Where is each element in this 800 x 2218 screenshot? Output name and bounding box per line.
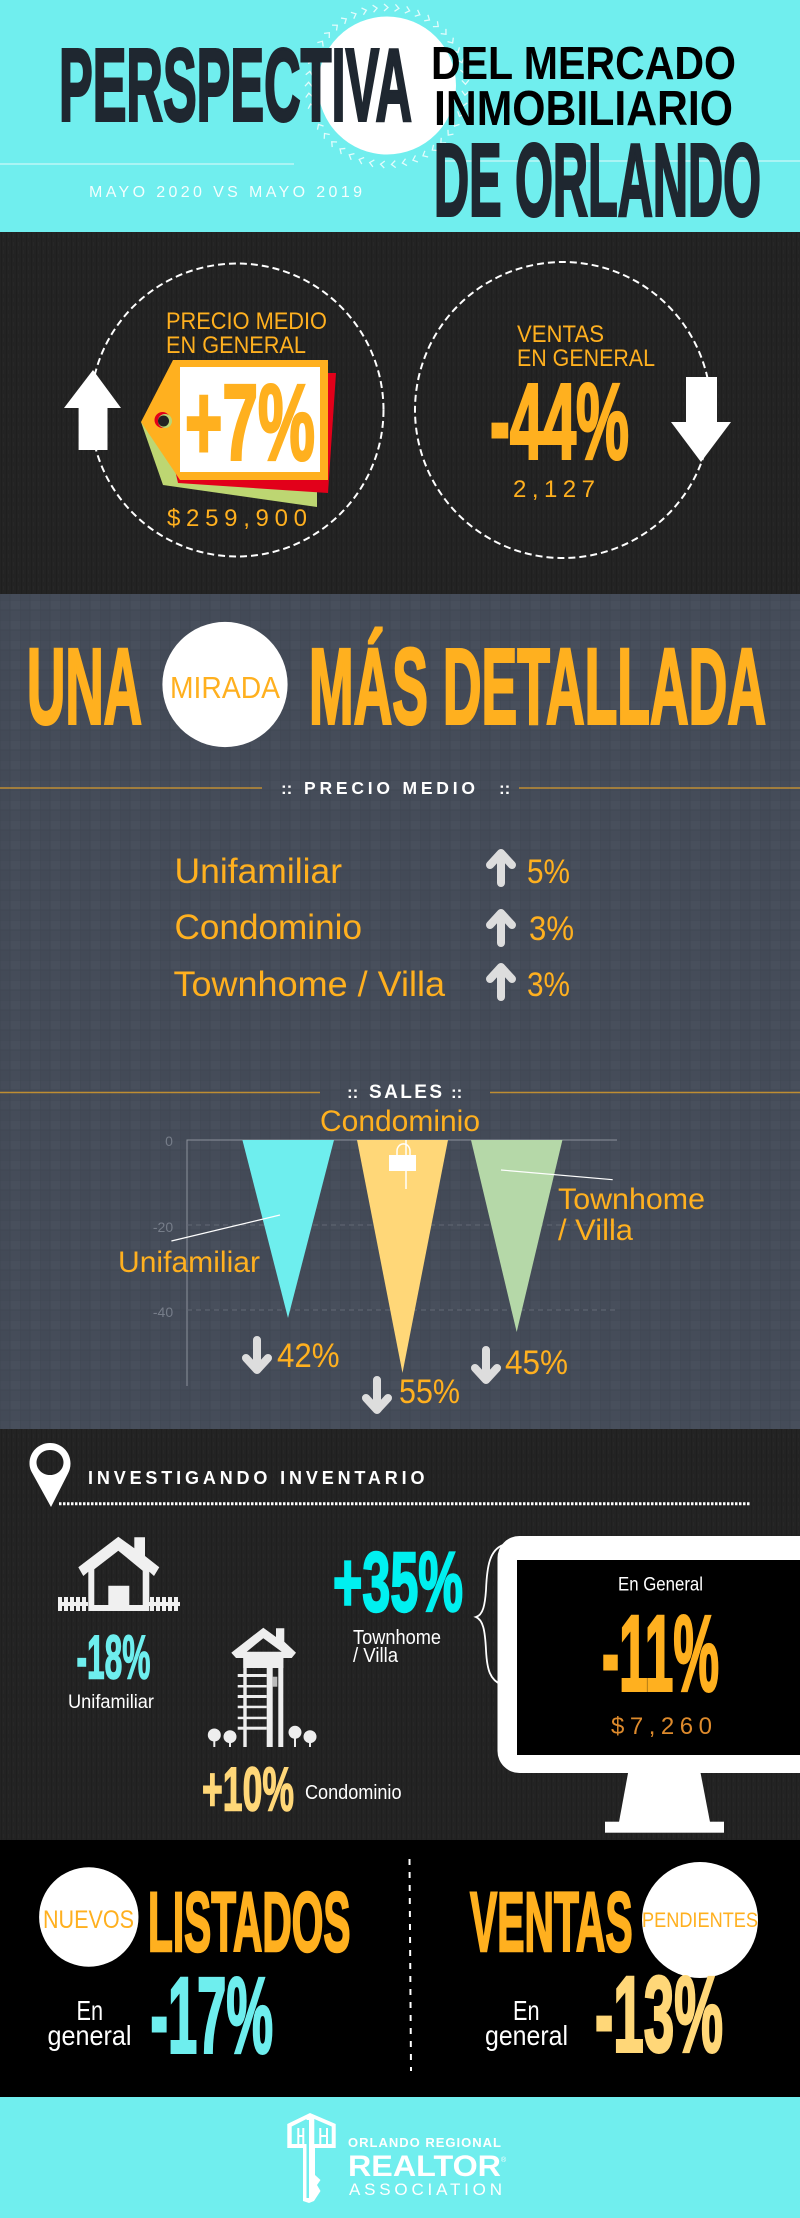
label: en general: [48, 1995, 132, 2051]
badge: nuevos: NUEVOS: [43, 1906, 134, 1934]
label: condominio: Condominio: [305, 1782, 402, 1804]
subheading: sales: ::: [451, 1083, 462, 1102]
label: townhome villa: Townhome: [353, 1627, 441, 1649]
title: inmobiliario: INMOBILIARIO: [434, 82, 733, 136]
stat: -18%: -18%: [76, 1623, 150, 1692]
value: price: $7,260: [611, 1713, 712, 1740]
label: townhome villa: / Villa: [353, 1645, 399, 1667]
list: price by type: Townhome / Villa: [174, 965, 446, 1004]
logo: key: [287, 2113, 336, 2203]
icon: price tag: [141, 360, 336, 507]
label: townhome villa: [353, 1627, 441, 1667]
subheading: precio medio: ::: [499, 779, 510, 798]
bar: condominio: [357, 1140, 448, 1373]
arrow up: [64, 370, 121, 450]
label: en general: En General: [618, 1575, 703, 1596]
chart label: townhome: Townhome: [558, 1183, 705, 1216]
chart label: condominio: Condominio: [320, 1105, 480, 1138]
subheading: sales: ::: [347, 1083, 358, 1102]
panel: a closer look: [0, 594, 800, 1429]
label: precio medio: PRECIO MEDIO: [166, 308, 327, 335]
label: en general: general: [485, 2020, 568, 2051]
stat: +10%: +10%: [202, 1755, 294, 1824]
panel: new listings and pending sales: -17%: [150, 1954, 273, 2076]
chart label: townhome: / Villa: [558, 1214, 633, 1247]
chevron ring and white circle: [305, 4, 469, 168]
bar: townhome: [471, 1140, 562, 1332]
stat: sales down 45%: [475, 1344, 568, 1382]
panel: new listings and pending sales: LISTADOS: [148, 1875, 350, 1969]
panel: new listings and pending sales: VENTAS: [470, 1875, 633, 1969]
value: median price: $259,900: [167, 505, 307, 532]
brace: [476, 1545, 503, 1685]
value: sales count: 2,127: [513, 476, 595, 503]
list: price by type: Condominio: [174, 908, 362, 947]
icon: map pin: [30, 1443, 70, 1507]
label: en general: general: [48, 2020, 132, 2051]
subheading: sales: SALES: [369, 1082, 442, 1103]
chart label: unifamiliar: Unifamiliar: [118, 1246, 260, 1279]
panel: inventory: [0, 1429, 800, 1840]
chart label: townhome: [558, 1183, 705, 1247]
panel: a closer look: UNA: [27, 626, 142, 746]
list: price by type: 3%: [527, 966, 570, 1004]
icon: house: [58, 1537, 180, 1611]
stat: +35%: +35%: [333, 1535, 463, 1629]
panel: header: [0, 0, 800, 238]
logo text: realtor: REALTOR: [348, 2150, 501, 2183]
subheading: precio medio: ::: [281, 779, 292, 798]
panel: footer: [0, 2097, 800, 2218]
chart: sales by type: -40: [153, 1304, 173, 1320]
stat: sales down 55%: 55%: [399, 1373, 460, 1411]
subheading: precio medio: PRECIO MEDIO: [304, 778, 475, 798]
stat: sales down 45%: 45%: [505, 1344, 568, 1382]
stat: sales down 42%: 42%: [277, 1337, 340, 1375]
badge: pendientes: PENDIENTES: [642, 1909, 758, 1932]
subheading: sales: [347, 1082, 462, 1103]
chart: sales by type: 0: [165, 1133, 173, 1149]
arrow down: [671, 377, 731, 462]
date subtitle: MAYO 2020 VS MAYO 2019: [89, 184, 362, 201]
stat: +7%: +7%: [185, 362, 315, 482]
badge: mirada: MIRADA: [170, 670, 280, 705]
label: en general: [485, 1995, 568, 2051]
label: unifamiliar: Unifamiliar: [68, 1692, 155, 1713]
list: price by type: 3%: [529, 910, 574, 948]
logo text: orlando regional: ORLANDO REGIONAL: [348, 2135, 501, 2150]
logo text: association: ASSOCIATION: [349, 2180, 502, 2199]
panel: overall price and sales: [0, 232, 800, 594]
logo text: realtor: ®: [501, 2156, 507, 2164]
label: en general: EN GENERAL: [166, 332, 306, 359]
label: en general: En: [76, 1995, 103, 2026]
label: ventas: VENTAS: [517, 321, 604, 348]
stat: sales down 42%: [246, 1337, 340, 1375]
badge: nuevos: [39, 1867, 138, 1967]
icon: condominium tower: [208, 1628, 316, 1747]
icon: monitor: [498, 1536, 800, 1833]
stat: sales down 55%: [366, 1373, 460, 1411]
label: en general: En: [513, 1995, 540, 2026]
list: price by type: 5%: [527, 853, 570, 891]
label: en general: EN GENERAL: [517, 345, 655, 372]
badge: mirada: [162, 622, 288, 747]
list: price by type: [174, 852, 574, 1004]
chart: sales by type: [153, 1133, 617, 1386]
list: price by type: Unifamiliar: [174, 852, 342, 891]
bar: unifamiliar: [242, 1140, 334, 1318]
chart: sales by type: -20: [153, 1219, 173, 1235]
panel: header: PERSPECTIVA: [59, 28, 412, 142]
panel: new listings and pending sales: [0, 1840, 800, 2097]
badge: pendientes: [642, 1862, 758, 1978]
title: del mercado: DEL MERCADO: [431, 37, 736, 89]
icon: shopping bag: [389, 1140, 416, 1189]
heading: investigando inventario: INVESTIGANDO INVENTARIO: [88, 1468, 424, 1488]
stat: -44%: -44%: [490, 360, 629, 482]
